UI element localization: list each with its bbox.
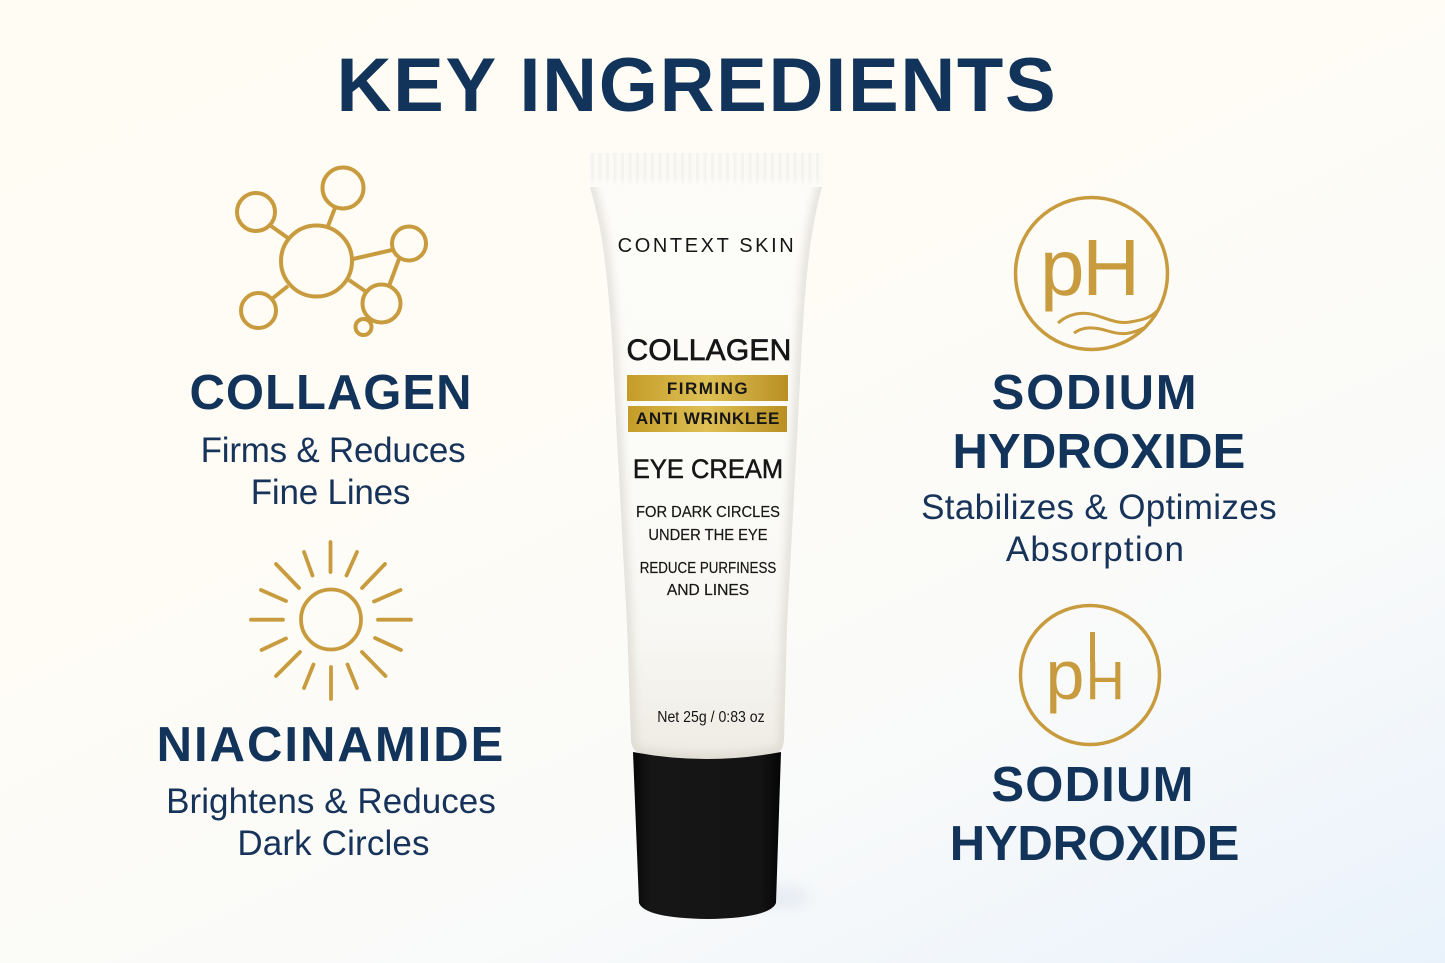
icon: pH small circle: p — [1046, 636, 1084, 714]
tube cap — [633, 752, 781, 919]
shadow — [739, 886, 811, 908]
text: niacinamide benefit: Dark Circles — [237, 824, 430, 863]
heading: sodium hydroxide one: SODIUM — [992, 366, 1198, 420]
tube description one: UNDER THE EYE — [648, 527, 768, 544]
heading: niacinamide: NIACINAMIDE — [157, 718, 505, 772]
tube brand: CONTEXT SKIN — [618, 235, 796, 257]
heading: sodium hydroxide two: HYDROXIDE — [950, 817, 1239, 871]
tube description two: AND LINES — [667, 582, 749, 599]
tube anti wrinkle: ANTI WRINKLEE — [636, 409, 780, 428]
text: sodium hydroxide benefit: Absorption — [1006, 530, 1185, 569]
tube net weight: Net 25g / 0:83 oz — [657, 709, 764, 726]
heading: sodium hydroxide one — [952, 366, 1246, 479]
text: niacinamide benefit — [166, 782, 496, 863]
tube firming: FIRMING — [667, 379, 749, 398]
text: sodium hydroxide benefit: Stabilizes & Optimizes — [921, 488, 1277, 527]
text: collagen benefit — [201, 431, 465, 512]
icon: pH large circle: pH — [1040, 223, 1140, 312]
heading: sodium hydroxide two: SODIUM — [991, 758, 1195, 812]
heading: sodium hydroxide one: HYDROXIDE — [952, 425, 1246, 479]
tube description two — [640, 560, 776, 599]
tube name: COLLAGEN — [626, 334, 792, 367]
product tube — [590, 153, 822, 919]
tube eye cream: EYE CREAM — [633, 454, 783, 484]
tube description two: REDUCE PURFINESS — [640, 560, 776, 577]
text: collagen benefit: Firms & Reduces — [201, 431, 465, 470]
tube description one: FOR DARK CIRCLES — [636, 504, 780, 521]
heading: sodium hydroxide two — [950, 758, 1239, 871]
text: collagen benefit: Fine Lines — [251, 473, 410, 512]
icon: pH small circle: H — [1086, 651, 1125, 711]
title: KEY INGREDIENTS — [337, 43, 1057, 128]
tube description one — [636, 504, 780, 544]
heading: collagen: COLLAGEN — [190, 366, 472, 420]
text: sodium hydroxide benefit — [921, 488, 1277, 569]
text: niacinamide benefit: Brightens & Reduces — [166, 782, 496, 821]
